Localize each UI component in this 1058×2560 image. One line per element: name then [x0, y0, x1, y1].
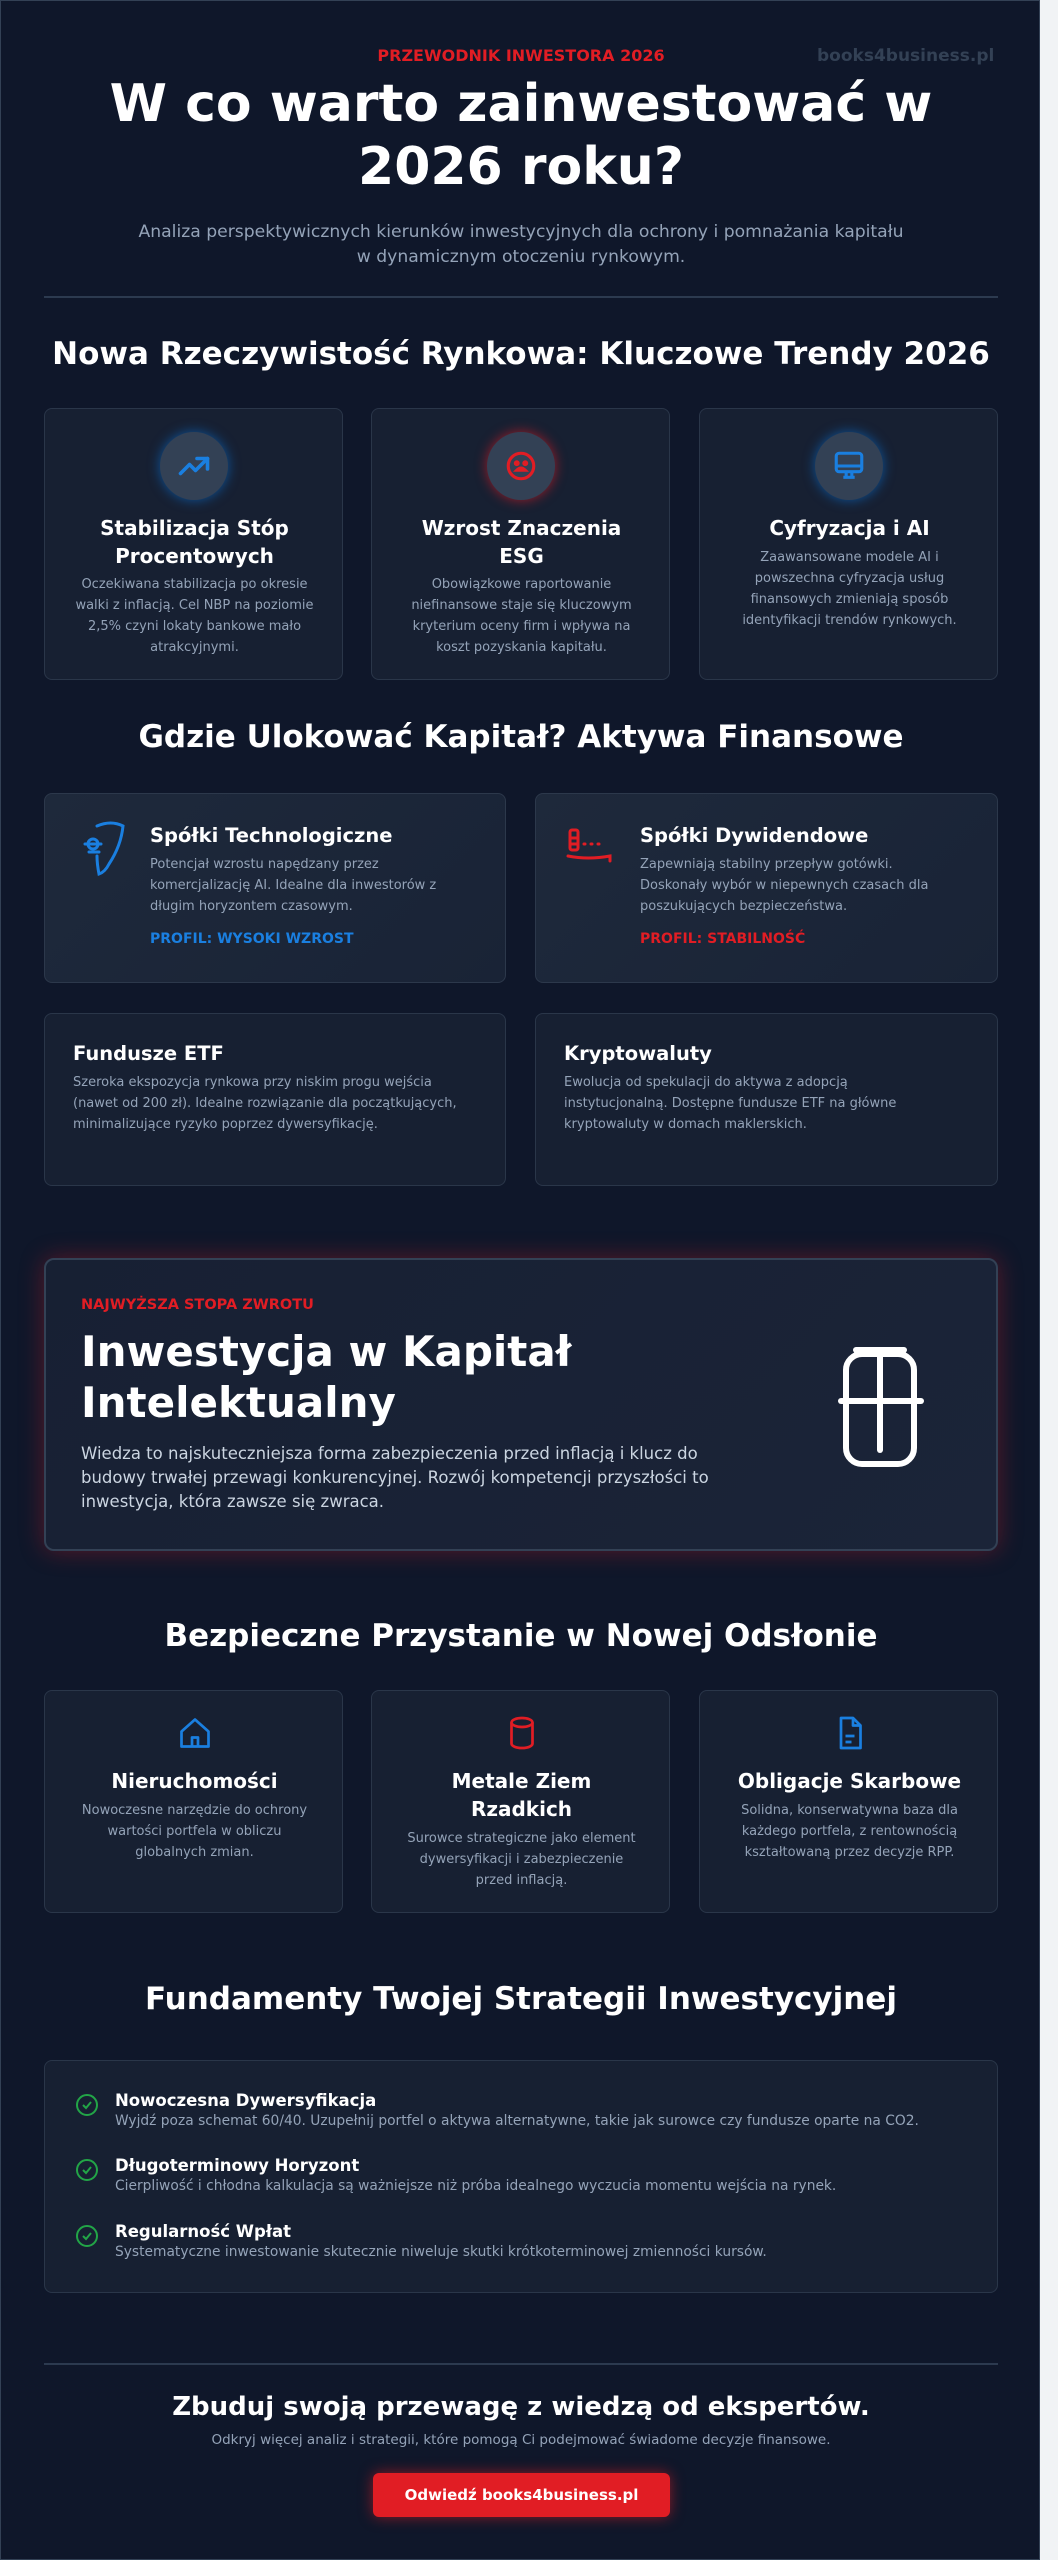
card: bonds: Solidna, konserwatywna baza dla każdego portfela, z rentownością kształtowaną przez decyzje RPP.: [741, 1803, 958, 1860]
item 2: Długoterminowy Horyzont: [115, 2156, 359, 2175]
CTA button: [373, 2473, 670, 2517]
title: Inwestycja w Kapitał: [81, 1327, 571, 1376]
text: Procentowych: [115, 544, 274, 568]
item 1: Nowoczesna Dywersyfikacja: [115, 2091, 376, 2110]
text: Zaawansowane modele AI i powszechna cyfryzacja usług finansowych zmieniają sposób identyfikacji trendów rynkowych.: [742, 550, 957, 628]
item 1: Wyjdź poza schemat 60/40. Uzupełnij portfel o aktywa alternatywne, takie jak surowce czy fundusze oparte na CO2.: [115, 2113, 919, 2129]
text: Potencjał wzrostu napędzany przez komercjalizację AI. Idealne dla inwestorów z długim horyzontem czasowym.: [150, 857, 436, 914]
card: real estate: [44, 1690, 343, 1913]
heading: strategy: Fundamenty Twojej Strategii Inwestycyjnej: [145, 1981, 897, 2017]
card: real estate: Nieruchomości: [111, 1769, 278, 1793]
card: bonds: Obligacje Skarbowe: [738, 1769, 961, 1793]
card: tech: [44, 793, 506, 983]
subtitle: [138, 222, 904, 267]
text: [75, 516, 314, 655]
text: PROFIL: WYSOKI WZROST: [150, 931, 354, 947]
subtitle: Analiza perspektywicznych kierunków inwestycyjnych dla ochrony i pomnażania kapitału: [138, 222, 904, 242]
subtitle: w dynamicznym otoczeniu rynkowym.: [357, 247, 685, 267]
text: Stabilizacja Stóp: [100, 516, 289, 540]
title: [81, 1327, 572, 1427]
card: crypto: [535, 1013, 998, 1186]
icon: document: [840, 1716, 862, 1750]
title: W co warto zainwestować w: [110, 74, 932, 134]
text: ESG: [499, 544, 544, 568]
card: rare earth: Rzadkich: [471, 1797, 572, 1821]
feature: intellectual capital: [44, 1258, 998, 1551]
card: real estate: Nowoczesne narzędzie do ochrony wartości portfela w obliczu globalnych zmian.: [82, 1803, 307, 1860]
panel: strategy list: [44, 2060, 998, 2293]
card: ETF: [44, 1013, 506, 1186]
icon: dividend: [566, 828, 612, 862]
icon: house: [180, 1718, 210, 1748]
item 3: Systematyczne inwestowanie skutecznie niweluje skutki krótkoterminowej zmienności kursów.: [115, 2244, 767, 2260]
text: Wzrost Znaczenia: [422, 516, 621, 540]
item 2: Cierpliwość i chłodna kalkulacja są ważniejsze niż próba idealnego wyczucia momentu wejścia na rynek.: [115, 2178, 836, 2194]
CTA heading: Zbuduj swoją przewagę z wiedzą od ekspertów.: [172, 2392, 870, 2422]
text: Spółki Technologiczne: [150, 824, 392, 847]
card: ESG: [371, 408, 670, 680]
text: [150, 824, 436, 947]
card: rare earth: Metale Ziem: [452, 1769, 591, 1793]
eyebrow: NAJWYŻSZA STOPA ZWROTU: [81, 1297, 314, 1313]
card: dividends: [535, 793, 998, 983]
card: crypto: Ewolucja od spekulacji do aktywa z adopcją instytucjonalną. Dostępne fundusze ETF na główne kryptowaluty w domach maklerskich.: [564, 1075, 896, 1132]
title: Intelektualny: [81, 1378, 396, 1427]
card: ETF: Fundusze ETF: [73, 1042, 224, 1065]
heading: trends: Nowa Rzeczywistość Rynkowa: Kluczowe Trendy 2026: [52, 336, 990, 372]
text: Obowiązkowe raportowanie niefinansowe staje się kluczowym kryterium oceny firm i wpływa na koszt pozyskania kapitału.: [411, 577, 632, 655]
text: [411, 516, 632, 655]
card: stopy: [44, 408, 343, 680]
eyebrow: PRZEWODNIK INWESTORA 2026: [377, 46, 665, 65]
text: Spółki Dywidendowe: [640, 824, 868, 847]
icon: tech head: [84, 822, 125, 876]
brand: books4business.pl: [817, 46, 994, 66]
icon: monitor: [815, 432, 883, 500]
item 2: [76, 2156, 836, 2194]
card: rare earth: [371, 1690, 670, 1913]
text: PROFIL: STABILNOŚĆ: [640, 931, 805, 947]
CTA subtext: Odkryj więcej analiz i strategii, które pomogą Ci podejmować świadome decyzje finansowe.: [211, 2432, 831, 2448]
text: Oczekiwana stabilizacja po okresie walki z inflacją. Cel NBP na poziomie 2,5% czyni lokaty bankowe mało atrakcyjnymi.: [75, 577, 314, 655]
icon: cylinder: [510, 1716, 534, 1750]
title: [110, 74, 932, 197]
icon: leaf badge: [487, 432, 555, 500]
item 3: Regularność Wpłat: [115, 2222, 291, 2241]
item 1: [76, 2091, 919, 2129]
icon: trend up: [160, 432, 228, 500]
item 3: [76, 2222, 767, 2260]
body: Wiedza to najskuteczniejsza forma zabezpieczenia przed inflacją i klucz do budowy trwałej przewagi konkurencyjnej. Rozwój kompetencji przyszłości to inwestycja, która zawsze się zwraca.: [81, 1444, 709, 1511]
title: 2026 roku?: [358, 137, 684, 197]
text: Cyfryzacja i AI: [769, 516, 930, 540]
card: crypto: Kryptowaluty: [564, 1042, 712, 1065]
text: Zapewniają stabilny przepływ gotówki. Doskonały wybór w niepewnych czasach dla poszukujących bezpieczeństwa.: [640, 857, 928, 914]
icon: book: [838, 1347, 924, 1467]
card: AI: [699, 408, 998, 680]
card: ETF: Szeroka ekspozycja rynkowa przy niskim progu wejścia (nawet od 200 zł). Idealne rozwiązanie dla początkujących, minimalizujące ryzyko poprzez dywersyfikację.: [73, 1075, 457, 1132]
text: [742, 516, 957, 628]
card: bonds: [699, 1690, 998, 1913]
heading: assets: Gdzie Ulokować Kapitał? Aktywa Finansowe: [138, 719, 904, 755]
text: [640, 824, 928, 947]
heading: safe havens: Bezpieczne Przystanie w Nowej Odsłonie: [164, 1618, 878, 1654]
CTA button: Odwiedź books4business.pl: [405, 2486, 638, 2504]
card: rare earth: Surowce strategiczne jako element dywersyfikacji i zabezpieczenie przed inflacją.: [407, 1831, 636, 1888]
